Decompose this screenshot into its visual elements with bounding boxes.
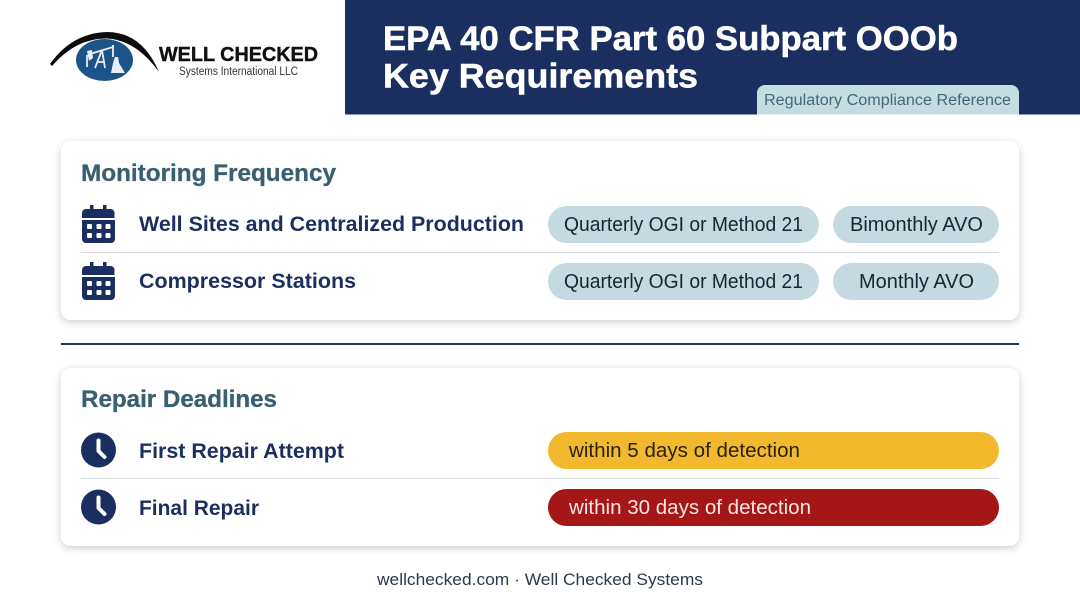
tag: regulatory compliance reference (757, 85, 1019, 114)
bar: within 5 days (548, 432, 999, 469)
title (383, 20, 958, 96)
title: Key Requirements (383, 58, 698, 96)
header banner (345, 0, 1080, 114)
bar: within 30 days (548, 489, 999, 526)
icon: calendar (82, 262, 115, 300)
bar: within 5 days: within 5 days of detection (568, 440, 800, 462)
logo: eye emblem (50, 32, 159, 81)
pill: bimonthly AVO (833, 206, 999, 243)
row label: first repair attempt: First Repair Attempt (139, 439, 344, 463)
icon: clock (81, 490, 116, 524)
row label: compressor stations: Compressor Stations (139, 269, 356, 293)
panel: repair deadlines (61, 368, 1019, 546)
tag: regulatory compliance reference: Regulatory Compliance Reference (764, 92, 1011, 109)
pill: bimonthly AVO: Bimonthly AVO (850, 214, 983, 236)
pill: quarterly OGI (548, 263, 819, 300)
title: EPA 40 CFR Part 60 Subpart OOOb (383, 20, 958, 58)
logo: company name: WELL CHECKED (159, 44, 318, 66)
pill: quarterly OGI: Quarterly OGI or Method 21 (564, 271, 803, 293)
bar: within 30 days: within 30 days of detection (568, 497, 811, 519)
heading: repair deadlines: Repair Deadlines (81, 386, 277, 413)
icon: calendar (82, 205, 115, 243)
pill: monthly AVO: Monthly AVO (859, 271, 974, 293)
logo (50, 32, 318, 81)
pill: monthly AVO (833, 263, 999, 300)
footer: wellchecked.com · Well Checked Systems (376, 571, 703, 589)
row label: well sites: Well Sites and Centralized Production (139, 212, 524, 236)
pill: quarterly OGI: Quarterly OGI or Method 21 (564, 214, 803, 236)
panel: monitoring frequency (61, 141, 1019, 320)
row label: final repair: Final Repair (139, 496, 260, 520)
heading: monitoring frequency: Monitoring Frequency (81, 160, 337, 187)
pill: quarterly OGI (548, 206, 819, 243)
logo: subtitle: Systems International LLC (179, 66, 298, 78)
icon: clock (81, 432, 116, 468)
